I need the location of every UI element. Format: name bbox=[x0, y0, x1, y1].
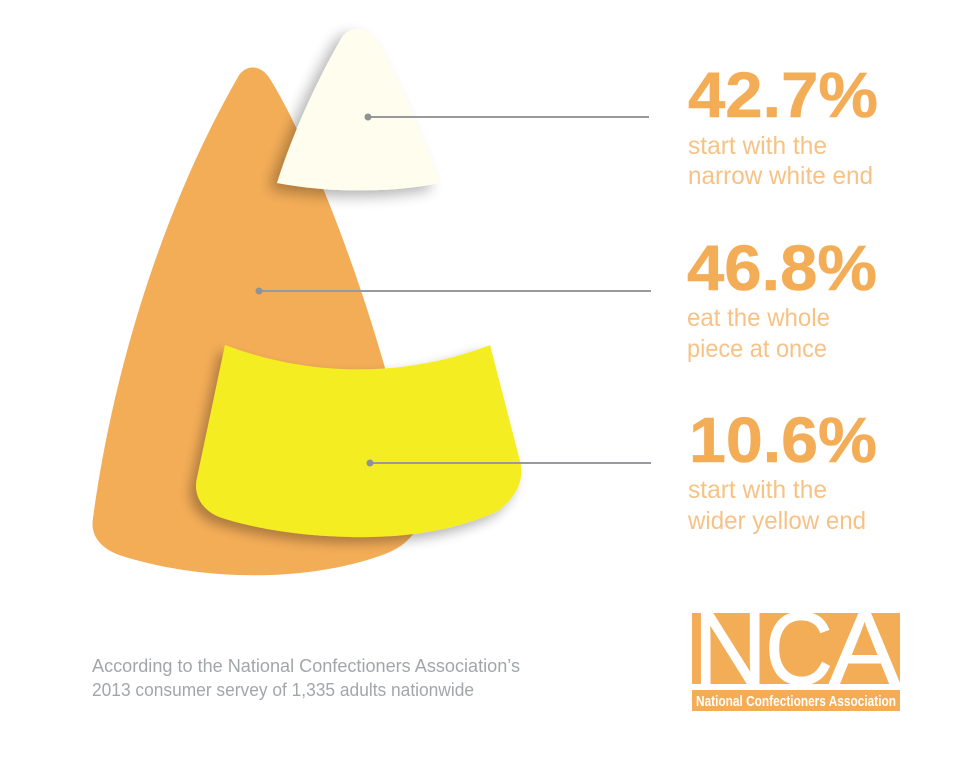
NCA logo: A bbox=[829, 591, 900, 706]
stat: yellow end first: wider yellow end bbox=[687, 507, 866, 535]
NCA logo: N bbox=[693, 591, 767, 706]
stat: whole piece bbox=[687, 232, 877, 363]
stat: yellow end first bbox=[687, 404, 877, 535]
stat: whole piece: piece at once bbox=[687, 335, 827, 363]
candy corn graphic bbox=[92, 29, 521, 575]
source note: According to the National Confectioners Association’s bbox=[92, 656, 520, 676]
NCA logo bbox=[692, 613, 900, 711]
NCA logo: C bbox=[765, 591, 833, 706]
source note bbox=[92, 656, 520, 700]
orange middle section bbox=[92, 67, 414, 575]
leader line: white end bbox=[364, 114, 649, 120]
stat: white end first: 42.7% bbox=[688, 59, 878, 131]
leader line: whole piece bbox=[256, 288, 651, 294]
yellow wide end bbox=[196, 345, 521, 537]
source note: 2013 consumer servey of 1,335 adults nationwide bbox=[92, 680, 474, 700]
stat: whole piece: 46.8% bbox=[687, 232, 877, 304]
stat: yellow end first: 10.6% bbox=[689, 404, 877, 476]
leader line: yellow end bbox=[366, 460, 651, 466]
stat: white end first: start with the bbox=[688, 132, 827, 160]
white narrow end bbox=[277, 29, 440, 190]
stat: yellow end first: start with the bbox=[688, 476, 827, 504]
stat: white end first bbox=[688, 59, 878, 190]
NCA logo: National Confectioners Association bbox=[696, 693, 896, 710]
stat: white end first: narrow white end bbox=[688, 162, 873, 190]
stat: whole piece: eat the whole bbox=[687, 304, 830, 332]
